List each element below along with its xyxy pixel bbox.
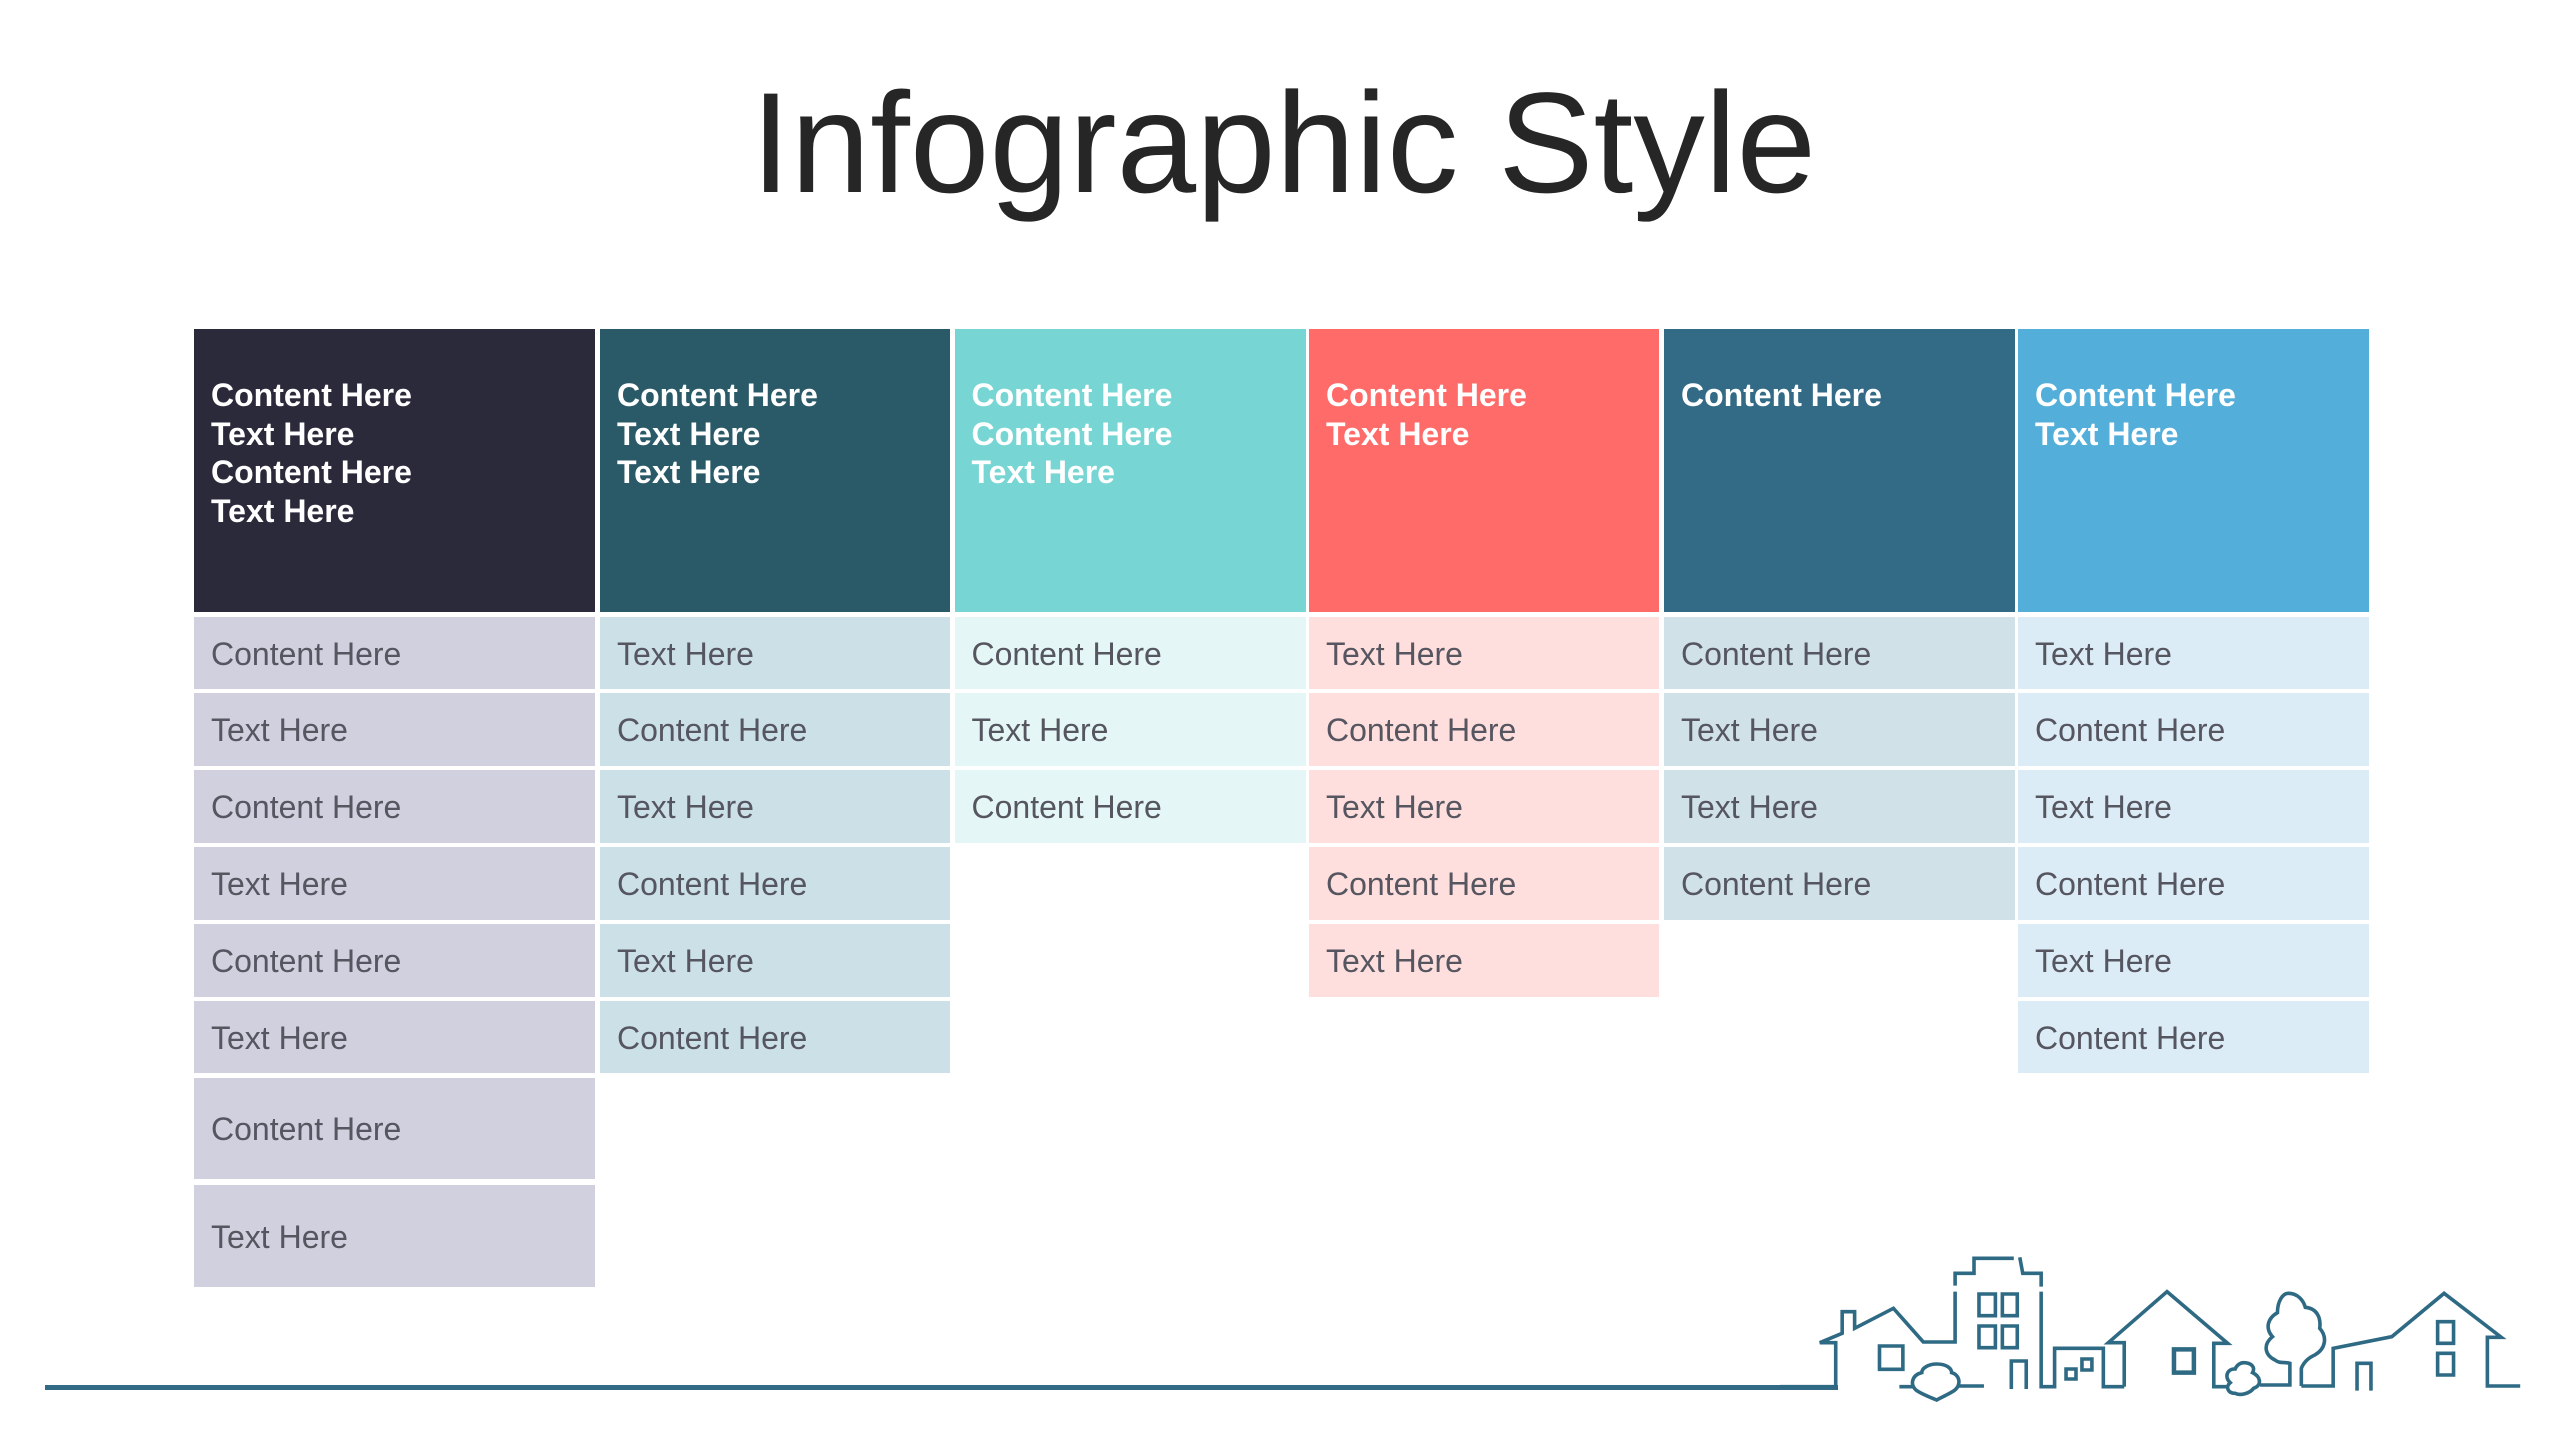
row cell: Content Here	[1681, 866, 1871, 902]
row cell: Content Here	[2035, 866, 2225, 902]
row cell: Content Here	[211, 636, 401, 672]
row cell: Content Here	[972, 636, 1162, 672]
row cell	[1309, 847, 1659, 920]
column 1 header	[194, 329, 595, 612]
row cell	[2018, 693, 2369, 766]
row cell: Text Here	[1681, 712, 1818, 748]
row cell	[194, 693, 595, 766]
row cell: Text Here	[972, 712, 1108, 748]
icon: tree	[2260, 1293, 2325, 1386]
row cell: Text Here	[617, 943, 754, 979]
panel: column 4	[1309, 329, 1659, 997]
column 3 header	[954, 329, 1306, 612]
icon: tall building	[1955, 1257, 2124, 1389]
column 6 header: Content Here	[2035, 377, 2236, 413]
row cell: Content Here	[211, 1111, 401, 1147]
row cell	[194, 1078, 595, 1179]
row cell	[194, 770, 595, 843]
row cell	[1664, 617, 2015, 689]
column 5 header	[1664, 329, 2015, 612]
row cell	[954, 693, 1306, 766]
row cell: Content Here	[617, 712, 807, 748]
icon: pitched-roof house	[2108, 1292, 2228, 1387]
row cell: Content Here	[2035, 1020, 2225, 1056]
row cell: Text Here	[2035, 636, 2172, 672]
column 3 header: Content Here	[972, 377, 1172, 413]
row cell	[1664, 847, 2015, 920]
column 1 header: Text Here	[211, 416, 354, 452]
row cell	[194, 1185, 595, 1287]
row cell	[194, 847, 595, 920]
column 4 header	[1309, 329, 1659, 612]
column 4 header: Text Here	[1326, 416, 1469, 452]
row cell: Text Here	[617, 636, 754, 672]
column 6 header	[2018, 329, 2369, 612]
row cell: Content Here	[1681, 636, 1871, 672]
column 2 header	[600, 329, 950, 612]
icon: bush left	[1899, 1364, 1984, 1400]
row cell: Text Here	[2035, 789, 2172, 825]
row cell: Content Here	[617, 866, 807, 902]
row cell: Text Here	[2035, 943, 2172, 979]
column 1 header: Content Here	[211, 454, 412, 490]
row cell	[1309, 693, 1659, 766]
column 3 header: Text Here	[972, 454, 1115, 490]
panel: column 2	[600, 329, 950, 1073]
icon: house with chimney	[1780, 1292, 1955, 1387]
panel: column 3	[955, 329, 1306, 843]
row cell	[2018, 617, 2369, 689]
column 1 header: Text Here	[211, 493, 354, 529]
panel: column 6	[2018, 329, 2369, 1073]
row cell: Content Here	[211, 943, 401, 979]
row cell: Content Here	[617, 1020, 807, 1056]
row cell	[1309, 924, 1659, 997]
title: Infographic Style	[751, 64, 1816, 223]
row cell	[600, 693, 950, 766]
row cell	[2018, 770, 2369, 843]
row cell	[1664, 770, 2015, 843]
row cell: Text Here	[617, 789, 754, 825]
row cell: Content Here	[1326, 866, 1516, 902]
row cell: Content Here	[2035, 712, 2225, 748]
row cell: Text Here	[211, 866, 348, 902]
row cell: Content Here	[1326, 712, 1516, 748]
column 6 header: Text Here	[2035, 416, 2178, 452]
icon: bush right	[2227, 1363, 2259, 1394]
row cell	[2018, 847, 2369, 920]
column 2 header: Text Here	[617, 454, 760, 490]
row cell	[954, 770, 1306, 843]
column 2 header: Content Here	[617, 377, 818, 413]
row cell: Text Here	[211, 1020, 348, 1056]
row cell	[600, 1001, 950, 1073]
row cell: Text Here	[1326, 636, 1463, 672]
row cell: Text Here	[1326, 789, 1463, 825]
column 4 header: Content Here	[1326, 377, 1527, 413]
column 5 header: Content Here	[1681, 377, 1882, 413]
row cell	[194, 924, 595, 997]
row cell	[2018, 924, 2369, 997]
row cell	[2018, 1001, 2369, 1073]
column 3 header: Content Here	[972, 416, 1172, 452]
row cell	[1664, 693, 2015, 766]
row cell	[600, 770, 950, 843]
row cell: Content Here	[972, 789, 1162, 825]
row cell	[1309, 617, 1659, 689]
row cell	[600, 847, 950, 920]
row cell	[954, 617, 1306, 689]
icon: long house	[2301, 1293, 2520, 1391]
column 1 header: Content Here	[211, 377, 412, 413]
row cell	[194, 1001, 595, 1073]
row cell	[600, 617, 950, 689]
ground line	[45, 1385, 1838, 1390]
panel: column 5	[1664, 329, 2015, 920]
row cell: Text Here	[211, 1219, 348, 1255]
icon: town skyline	[1780, 1256, 2520, 1402]
row cell: Text Here	[1326, 943, 1463, 979]
row cell: Text Here	[1681, 789, 1818, 825]
row cell: Content Here	[211, 789, 401, 825]
row cell	[194, 617, 595, 689]
row cell: Text Here	[211, 712, 348, 748]
panel: column 1	[194, 329, 595, 1287]
column 2 header: Text Here	[617, 416, 760, 452]
row cell	[1309, 770, 1659, 843]
row cell	[600, 924, 950, 997]
